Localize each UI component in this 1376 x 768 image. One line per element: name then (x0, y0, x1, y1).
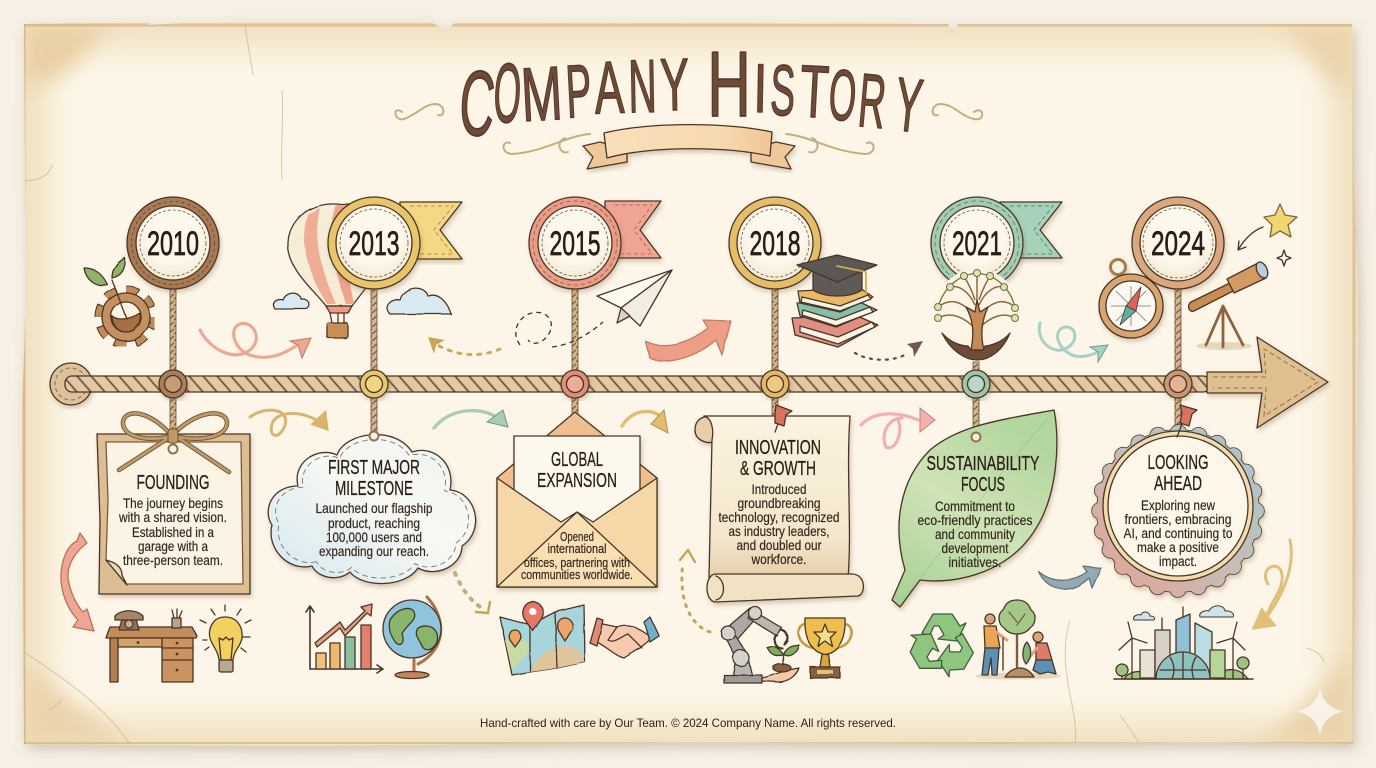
arrow: slate curve to badge (1038, 566, 1101, 589)
medallion: 2024 (1132, 197, 1224, 289)
title: Company History: Y (659, 43, 690, 126)
medallion: 2013: 2013 (348, 225, 400, 263)
heading: Global Expansion: GLOBAL (551, 449, 603, 471)
body: First Major Milestone: Launched our flagship (316, 500, 433, 516)
envelope (497, 412, 657, 587)
heading: Innovation and Growth: & GROWTH (740, 458, 816, 480)
heading: First Major Milestone: FIRST MAJOR (328, 457, 420, 479)
title: Company History: H (707, 32, 751, 136)
icon: desk with telephone (106, 609, 197, 682)
icon: trophy (798, 618, 852, 678)
arrow: pink loop to leaf (861, 408, 935, 448)
body: Founding: Established in a (132, 524, 214, 540)
heading: Sustainability Focus: FOCUS (961, 474, 1005, 496)
cloud shape (268, 432, 476, 584)
body: Global Expansion: communities worldwide. (521, 567, 633, 582)
icon: red push pin (775, 405, 792, 432)
icon: books and graduation cap (792, 255, 878, 347)
medallion: 2021 (931, 197, 1023, 289)
title: Company History: P (564, 48, 594, 134)
title: Company History: T (798, 51, 831, 134)
medallion: 2018 (729, 197, 821, 289)
icon: tree of life (934, 269, 1019, 360)
icon: people planting tree (975, 600, 1061, 680)
medallion: 2021: 2021 (952, 225, 1002, 263)
title: Company History: I (753, 49, 768, 127)
title: Company History: C (456, 51, 498, 156)
icon: handshake (590, 617, 659, 658)
arrow: gold loop down to city (1254, 540, 1291, 628)
title: Company History: M (519, 50, 564, 138)
body: Founding: garage with a (138, 538, 208, 554)
medallion: 2024: 2024 (1151, 225, 1205, 263)
title: Company History: O (491, 46, 524, 141)
body: Global Expansion: offices, partnering with (524, 555, 630, 570)
icon: paper plane with dashed trail (516, 270, 672, 347)
body: Sustainability Focus: Commitment to (935, 498, 1015, 514)
arrow: coral down to desk (61, 533, 94, 631)
body: Innovation and Growth (718, 481, 840, 567)
body: Founding: three-person team. (123, 552, 223, 568)
arrow: gold loop (250, 410, 327, 435)
heading: Looking Ahead: LOOKING (1148, 452, 1208, 474)
heading: Sustainability Focus: SUSTAINABILITY (926, 453, 1040, 475)
icon: gear with sprout (84, 258, 151, 342)
icon: green city with wind turbines (1114, 606, 1253, 679)
arrow: teal loop (1039, 323, 1108, 362)
body: Looking Ahead: frontiers, embracing (1124, 511, 1232, 527)
body: Looking Ahead: impact. (1159, 553, 1197, 569)
panel: Global Expansion (497, 412, 657, 587)
body: Innovation and Growth: Introduced (752, 481, 806, 497)
heading: Sustainability Focus (926, 453, 1040, 496)
body: First Major Milestone: expanding our reach. (319, 543, 429, 559)
title: Company History (456, 32, 926, 156)
body: Sustainability Focus: initiatives. (948, 554, 1002, 570)
icon: small clouds around balloon (273, 288, 451, 314)
heading: Looking Ahead (1148, 452, 1208, 495)
heading: Founding: FOUNDING (136, 472, 210, 494)
body: Innovation and Growth: as industry leaders, (728, 523, 830, 539)
icon: compass (1099, 260, 1163, 338)
parchment scroll (695, 416, 863, 602)
heading: First Major Milestone (328, 457, 420, 500)
arrow: dotted gold to map (455, 573, 490, 613)
icon: star, sparkle and pointer (1238, 204, 1297, 266)
heading: Innovation and Growth: INNOVATION (735, 437, 821, 459)
icon: recycle arrows (903, 614, 979, 681)
body: Looking Ahead: AI, and continuing to (1124, 525, 1233, 541)
medallion: 2015 (529, 197, 621, 289)
panel: Looking Ahead (1097, 405, 1259, 592)
scalloped badge (1097, 430, 1259, 592)
icon: rope bow (119, 413, 229, 472)
body: Sustainability Focus: and community (935, 526, 1015, 542)
timeline arrow head (1207, 337, 1328, 428)
heading: Global Expansion: EXPANSION (537, 470, 617, 492)
title: Company History: Y (891, 61, 926, 149)
tag paper (97, 434, 250, 594)
icon: light bulb (200, 605, 251, 672)
timeline rope with end cap (50, 363, 1210, 405)
panel: Sustainability Focus (892, 410, 1057, 607)
arrow: green curve to envelope (434, 410, 508, 428)
body: Looking Ahead (1124, 497, 1233, 569)
heading: Innovation and Growth (735, 437, 821, 480)
icon: hot-air balloon (288, 204, 372, 338)
heading: Global Expansion (537, 449, 617, 492)
arrow: coral loop (200, 323, 311, 358)
medallion: 2018: 2018 (750, 225, 800, 263)
panel: Innovation and Growth (695, 405, 863, 602)
body: Global Expansion: international (548, 541, 607, 556)
medallion flags (400, 201, 1062, 259)
body: Global Expansion: Opened (560, 529, 594, 544)
icon: folded map with pins (500, 602, 585, 675)
icon: telescope on tripod (1189, 260, 1270, 350)
ribbon banner under title (583, 125, 795, 169)
arrow: gold curve to scroll (622, 410, 668, 433)
body: Innovation and Growth: and doubled our (736, 537, 822, 553)
title: Company History: R (855, 57, 889, 145)
icon: desk globe (383, 597, 441, 678)
arrow: coral swoosh (646, 320, 731, 361)
body: First Major Milestone (316, 500, 433, 559)
body: First Major Milestone: 100,000 users and (326, 529, 422, 545)
body: Innovation and Growth: groundbreaking (738, 495, 820, 511)
body: Innovation and Growth: workforce. (751, 551, 806, 567)
title: Company History: S (769, 50, 797, 132)
medallion: 2010 (127, 197, 219, 289)
flourish: title side scrolls (395, 104, 982, 154)
year medallions (127, 197, 1224, 289)
leaf shape (892, 410, 1057, 607)
title: Company History: A (593, 46, 626, 129)
medallion: 2015: 2015 (550, 225, 600, 263)
arrow: dotted to tree (855, 341, 923, 360)
body: Looking Ahead: Exploring new (1141, 497, 1216, 513)
arrow: dotted gold up to scroll (680, 550, 710, 632)
body: Founding: The journey begins (123, 495, 223, 511)
body: Sustainability Focus (918, 498, 1032, 570)
heading: Looking Ahead: AHEAD (1154, 473, 1202, 495)
body: Looking Ahead: make a positive (1137, 539, 1219, 555)
body: First Major Milestone: product, reaching (328, 515, 420, 531)
icon: corner sparkle watermark (1297, 688, 1343, 735)
body: Sustainability Focus: development (942, 540, 1009, 556)
medallion: 2010: 2010 (147, 225, 199, 263)
footer credit: Hand-crafted with care by Our Team. © 2024 Company Name. All rights reserved. (480, 716, 896, 730)
title: Company History: O (826, 54, 859, 136)
icon: robot arm with seedling (721, 606, 799, 683)
timeline nodes (159, 370, 1192, 398)
heading: First Major Milestone: MILESTONE (335, 478, 413, 500)
icon: growth chart (306, 604, 383, 673)
panel: First Major Milestone (268, 432, 476, 584)
body: Innovation and Growth: technology, recognized (718, 509, 840, 525)
medallion: 2013 (328, 197, 420, 289)
body: Global Expansion (521, 529, 633, 582)
title: Company History: N (628, 44, 657, 129)
panel: Founding (97, 413, 250, 594)
icon: coral push pin (1177, 405, 1197, 437)
body: Founding: with a shared vision. (118, 509, 227, 525)
arrow: dotted gold to balloon (428, 337, 500, 355)
body: Founding (118, 495, 227, 568)
body: Sustainability Focus: eco-friendly practices (918, 512, 1032, 528)
vertical rope connectors (170, 288, 1181, 438)
